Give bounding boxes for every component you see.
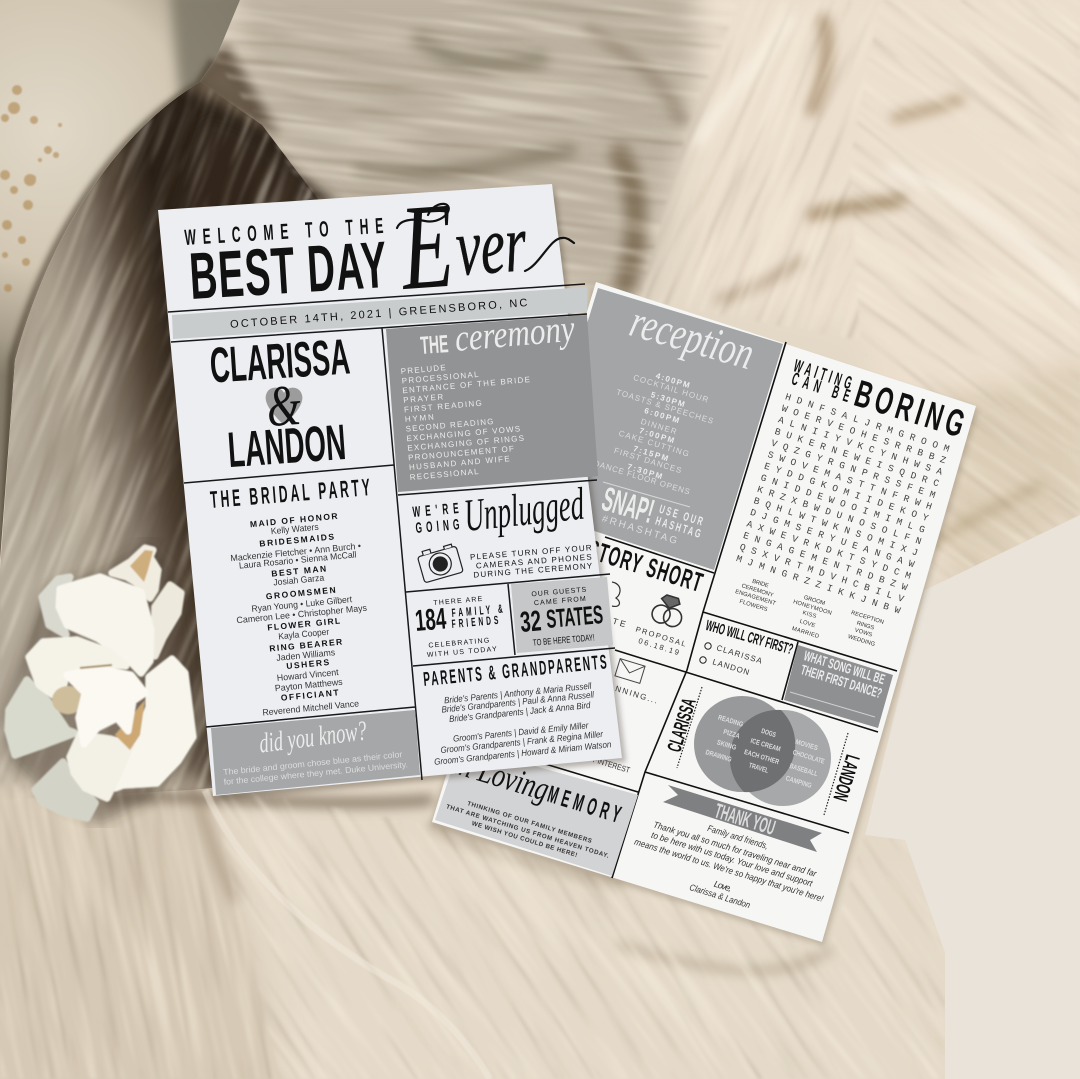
panel: in loving memory: MEMORY (544, 782, 624, 829)
panel: unplugged (412, 478, 593, 583)
panel: thank you: Thank you all so much for traveling near and far (652, 819, 818, 879)
panel: reception: USE OUR (657, 503, 704, 529)
panel: thank you (633, 785, 825, 910)
panel: in loving memory: WE WISH YOU COULD BE HERE! (471, 820, 578, 859)
panel: reception: COCKTAIL HOUR (632, 373, 710, 404)
title: ver (453, 197, 530, 293)
panel: reception: FIRST DANCES (613, 446, 683, 475)
panel: the bridal party: THE BRIDAL PARTY (209, 475, 371, 514)
panel: parents and grandparents: Bride's Grandparents | Jack & Anna Bird (449, 700, 592, 724)
date band (172, 287, 587, 339)
label: landon venn: LANDON (828, 752, 863, 803)
word list: BRIDE (751, 579, 769, 589)
panel: parents and grandparents: Bride's Grandparents | Paul & Anna Russell (441, 689, 595, 715)
word list: GROOM (803, 595, 826, 607)
word list: VOWS (854, 628, 873, 639)
panel: reception: #RHASHTAG (601, 514, 679, 547)
venn diagram (694, 696, 831, 806)
stat: family and friends: THERE ARE (433, 596, 483, 607)
title (184, 178, 574, 316)
panel: the bridal party: USHERS (286, 657, 330, 671)
panel: names: & (264, 372, 303, 439)
word search grid: BUKERNEWEISQDRC (773, 426, 946, 491)
title: BEST DAY (187, 228, 389, 314)
word list: LOVE (799, 619, 816, 629)
panel: our story short: 06.18.19 (637, 636, 680, 657)
panel: unplugged: GOING (415, 516, 460, 537)
panel: the bridal party: Kayla Cooper (278, 627, 330, 641)
venn diagram: ICE CREAM (750, 738, 781, 753)
panel: parents and grandparents: PARENTS & GRANDPARENTS (422, 652, 608, 691)
stat: family and friends: FAMILY & (451, 603, 503, 621)
venn diagram: DRAWING (705, 749, 733, 764)
panel: in loving memory: THAT ARE WATCHING US FROM HEAVEN TODAY. (445, 803, 610, 860)
word list: CEREMONY (741, 583, 774, 599)
panel: our story short: FIRST DATE (557, 599, 629, 630)
word search grid: VQZGYRGNPRSSFEM (770, 438, 943, 503)
panel: who will cry first: WHO WILL CRY FIRST? (704, 617, 795, 658)
cloth: gathered edge (205, 790, 490, 1079)
panel: the ceremony: EXCHANGING OF RINGS (407, 434, 524, 453)
stat: guests states: TO BE HERE TODAY! (532, 632, 595, 648)
panel: thank you: Clarissa & Landon (688, 882, 751, 910)
panel: in loving memory: In Loving (446, 744, 553, 809)
panel: reception (530, 288, 783, 570)
panel: reception: CAKE CUTTING (618, 429, 690, 459)
panel: the bridal party: OFFICIANT (280, 687, 340, 703)
panel: the bridal party: Kelly Waters (270, 522, 320, 536)
back card (430, 282, 978, 946)
panel: the ceremony: ceremony (453, 308, 576, 360)
word search grid: HDNFSALJRMGROOM (784, 391, 957, 457)
shadow: front card (158, 188, 626, 800)
panel: the bridal party: Ryan Young • Luke Gilbert (251, 594, 353, 614)
shadow: back card (430, 288, 978, 946)
word search grid: GNIDDEWOOIMIMLG (759, 472, 932, 537)
word list: MARRIED (791, 626, 820, 640)
panel: parents and grandparents: Groom's Grandparents | Frank & Regina Miller (440, 729, 604, 755)
venn diagram: MOVIES (794, 739, 819, 752)
panel: thank you: Love, (713, 879, 733, 894)
venn diagram: PIZZA (722, 729, 741, 740)
venn diagram: SKIING (716, 739, 737, 752)
venn diagram: TRAVEL (748, 762, 770, 775)
panel: the bridal party: Cameron Lee • Christopher Mays (236, 603, 368, 625)
panel: reception: HASHTAG (654, 515, 702, 541)
panel: first dance song: THEIR FIRST DANCE? (799, 661, 884, 701)
panel: the bridal party: Josiah Garza (273, 573, 325, 587)
panel: who will cry first: CLARISSA (715, 643, 764, 666)
panel: the bridal party: Laura Rosario • Sienna McCall (239, 549, 357, 571)
panel: parents and grandparents: Groom's Grandparents | Howard & Miriam Watson (434, 739, 612, 767)
panel: planning envelope: PLANNING... (595, 678, 660, 706)
panel: the bridal party: GROOMSMEN (265, 585, 336, 601)
label: landon venn (824, 733, 863, 815)
venn diagram: EACH OTHER (743, 749, 780, 766)
icon: diamond rings (650, 592, 687, 629)
dividers: back card rules (542, 342, 897, 878)
panel: the ceremony: PRONOUNCEMENT OF (408, 444, 514, 462)
word search grid: BQHLWTWKNSOMIXJ (752, 495, 925, 561)
stat: family and friends: FRIENDS (451, 614, 499, 632)
stat: family and friends: 184 (414, 602, 448, 638)
venn diagram: DOGS (760, 728, 777, 739)
panel: the ceremony (386, 308, 598, 492)
panel: the ceremony: PRELUDE (400, 363, 446, 376)
heading: waiting can be boring (789, 356, 970, 446)
stat: guests states: OUR GUESTS (531, 587, 587, 598)
panel: first dance song (784, 645, 893, 728)
panel: the bridal party: Jaden Williams (276, 647, 336, 663)
panel: thank you: to be here with us today. Your love and support (650, 830, 814, 889)
word search grid: EYDDGKOMIIDEKOY (763, 461, 936, 526)
word search grid: DJGMSERYUEANGAW (749, 507, 922, 572)
panel: the bridal party: Howard Vincent (276, 667, 340, 683)
panel: thank you: Family and friends, (706, 823, 769, 851)
word search grid: SWOVEMASTTNFRWH (766, 449, 939, 514)
word list: RINGS (856, 621, 875, 632)
label: clarissa venn (664, 687, 702, 768)
title: E (395, 178, 458, 316)
panel: the ceremony: PROCESSIONAL (401, 370, 479, 386)
word search grid: QSXVRTMDVHCBILV (738, 542, 911, 607)
panel: reception: 5:30PM (650, 390, 686, 409)
panel: reception: 7:15PM (632, 444, 670, 463)
panel: did you know: for the college where they met. Duke University. (223, 759, 408, 787)
panel: planning envelope: ON PINTEREST (581, 752, 631, 775)
word search grid: ALNIIYVKCYNHWSA (777, 414, 950, 480)
panel: the ceremony: HUSBAND AND WIFE (409, 454, 510, 472)
word search grid: AXWEVRKDKTSYDCM (745, 518, 918, 584)
panel: did you know (211, 710, 420, 795)
panel: reception: DANCE FLOOR OPENS (593, 459, 691, 497)
panel: reception: SNAP! (598, 480, 658, 531)
panel: parents and grandparents: Groom's Parents | David & Emily Miller (453, 720, 590, 744)
word search grid: WOERVEOHESRRBBZ (780, 403, 953, 468)
icon: heart (266, 388, 302, 425)
panel: did you know: The bride and groom chose blue as their color (223, 749, 403, 777)
panel: reception: reception (625, 295, 760, 379)
stat: guests states (511, 577, 613, 653)
cloth: lower left blend (0, 775, 290, 1079)
panel: the ceremony: PRAYER (403, 392, 444, 405)
panel: unplugged: CAMERAS AND PHONES (476, 552, 592, 571)
panel: the bridal party: RING BEARER (269, 637, 343, 653)
panel: the bridal party: BRIDESMAIDS (259, 531, 335, 549)
venn diagram: CHOCOLATE (792, 749, 825, 766)
title: WELCOME TO THE (184, 213, 384, 250)
icon: camera (416, 542, 463, 583)
heading: waiting can be boring: WAITING (791, 356, 854, 394)
heading: waiting can be boring: BORING (850, 372, 970, 446)
panel: reception: 4:00PM (655, 371, 691, 390)
panel: planning envelope (581, 659, 660, 775)
panel: the ceremony: SECOND READING (405, 417, 494, 434)
panel: in loving memory: THINKING OF OUR FAMILY MEMBERS (466, 800, 593, 845)
panel: parents and grandparents (422, 652, 612, 767)
venn diagram: BASEBALL (789, 763, 819, 778)
date band: OCTOBER 14TH, 2021 | GREENSBORO, NC (230, 297, 528, 331)
panel: the bridal party: BEST MAN (271, 563, 327, 579)
panel: reception: 7:30PM (626, 462, 664, 481)
word list: FLOWERS (739, 599, 768, 613)
panel: the ceremony: THE (419, 330, 449, 360)
stat: family and friends (414, 596, 503, 659)
panel: the bridal party (209, 475, 371, 718)
panel: thank you: THANK YOU (712, 800, 778, 840)
panel: our story short (544, 522, 707, 657)
panel: reception: DINNER (640, 417, 678, 436)
panel: the bridal party: FLOWER GIRL (267, 616, 341, 632)
panel: reception: TOASTS & SPEECHES (615, 388, 714, 426)
panel: who will cry first: LANDON (711, 657, 751, 677)
panel: the ceremony: RECESSIONAL (409, 467, 479, 482)
stat: family and friends: WITH US TODAY (427, 646, 497, 659)
stat: guests states: CAME FROM (534, 596, 586, 607)
panel: names (208, 328, 352, 478)
stat: family and friends: CELEBRATING (428, 637, 490, 650)
panel: first dance song: WHAT SONG WILL BE (802, 647, 887, 687)
panel: the bridal party: Mackenzie Fletcher • Ann Burch • (230, 541, 361, 563)
panel: in loving memory (435, 744, 638, 876)
panel: the bridal party: MAID OF HONOR (249, 511, 338, 529)
word list: WEDDING (847, 634, 876, 648)
panel: who will cry first (700, 617, 795, 677)
panel: the ceremony: ENTRANCE OF THE BRIDE (402, 375, 530, 395)
panel: the ceremony: FIRST READING (404, 399, 482, 414)
panel: unplugged: PLEASE TURN OFF YOUR (470, 543, 592, 562)
stat: guests states: STATES (545, 599, 604, 634)
stat: guests states: 32 (519, 605, 543, 639)
word list: HONEYMOON (792, 599, 832, 617)
panel: thank you: means the world to us. We're so happy that you're here! (633, 837, 825, 904)
icon: white flower (0, 540, 200, 825)
panel: our story short: OUR STORY SHORT (544, 522, 707, 598)
front card (158, 178, 626, 800)
dividers: front card rules (168, 284, 615, 780)
panel: our story short: PROPOSAL (635, 625, 687, 649)
panel: the bridal party: Reverend Mitchell Vance (262, 698, 359, 718)
word search grid: MJMNGRZZIKKJNBW (735, 553, 908, 618)
word search grid (732, 391, 960, 618)
panel: names: CLARISSA (208, 328, 352, 394)
label: clarissa venn: CLARISSA (664, 696, 701, 755)
panel: parents and grandparents: Bride's Parents | Anthony & Maria Russell (444, 681, 593, 705)
venn diagram: CAMPING (785, 775, 813, 790)
panel: unplugged: WE'RE (412, 499, 459, 521)
panel: the ceremony: EXCHANGING OF VOWS (406, 424, 520, 443)
word search grid: KRZXBWDUNOSOLFN (756, 484, 929, 549)
panel: unplugged: Unplugged (462, 478, 587, 541)
panel: reception: 6:00PM (643, 406, 681, 425)
panel: names: LANDON (226, 414, 348, 478)
venn diagram: READING (717, 714, 744, 729)
word list: KISS (802, 610, 817, 620)
panel: the ceremony: HYMN (404, 412, 434, 424)
word list (734, 579, 884, 648)
heading: waiting can be boring: CAN BE (789, 369, 852, 407)
panel: reception: 7:00PM (638, 426, 676, 445)
panel: did you know: did you know? (257, 716, 368, 760)
panel: unplugged: DURING THE CEREMONY (473, 561, 593, 580)
panel: the bridal party: Payton Matthews (274, 677, 344, 693)
cloth: left band (0, 82, 318, 792)
word search grid: ENGAGEMENTRDBZW (742, 530, 915, 595)
word list: ENGAGEMENT (734, 589, 777, 607)
word list: RECEPTION (850, 610, 884, 626)
